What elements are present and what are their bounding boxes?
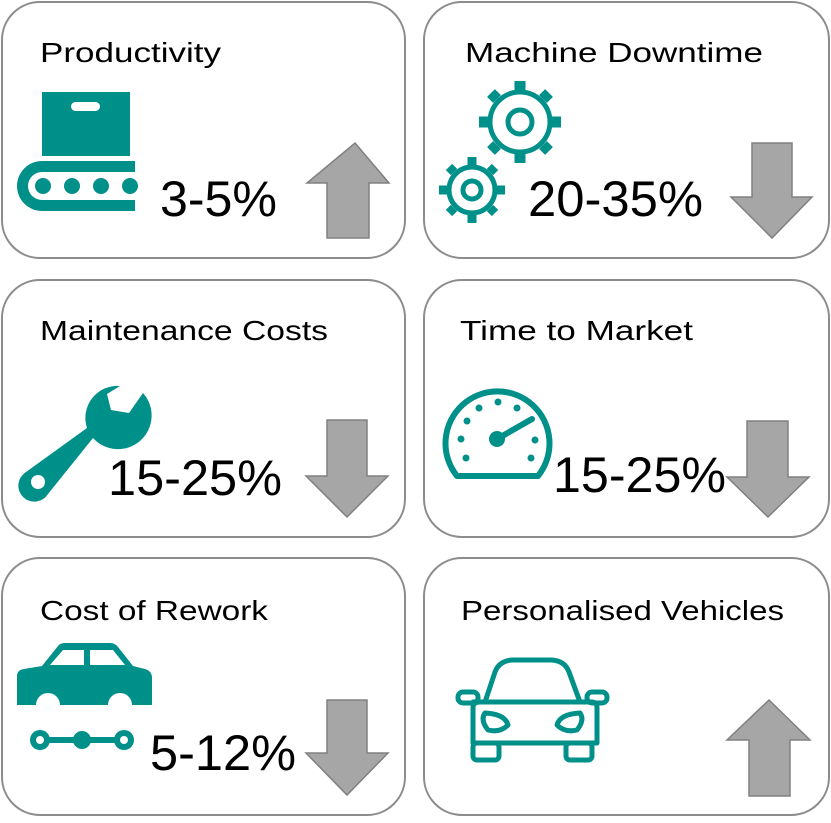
icon: conveyor bbox=[17, 92, 138, 211]
heading: maintenance costs: Maintenance Costs bbox=[40, 315, 328, 346]
arrow: down bbox=[306, 420, 388, 517]
heading: personalised vehicles: Personalised Vehicles bbox=[461, 595, 784, 626]
arrow: up bbox=[307, 143, 389, 238]
number: 15-25% (market): 15-25% bbox=[553, 447, 726, 503]
panel: time to market bbox=[424, 280, 829, 537]
arrow: down bbox=[727, 421, 809, 517]
number: 5-12%: 5-12% bbox=[150, 725, 296, 781]
heading: cost of rework: Cost of Rework bbox=[40, 595, 269, 626]
icon: speedometer bbox=[446, 391, 550, 476]
panel: maintenance costs bbox=[2, 280, 405, 537]
number: 3-5%: 3-5% bbox=[160, 171, 277, 227]
icon: car on line bbox=[17, 643, 152, 750]
number: 20-35%: 20-35% bbox=[528, 171, 703, 227]
panel: productivity bbox=[2, 2, 405, 258]
arrow: down bbox=[731, 143, 812, 238]
arrow: up bbox=[727, 700, 810, 796]
heading: machine downtime: Machine Downtime bbox=[465, 37, 763, 68]
heading: time to market: Time to Market bbox=[460, 315, 693, 346]
icon: wrench bbox=[18, 386, 152, 502]
panel: cost of rework bbox=[2, 558, 405, 815]
arrow: down bbox=[306, 700, 388, 795]
heading: productivity: Productivity bbox=[40, 37, 221, 68]
icon: gears bbox=[439, 81, 561, 223]
panel: machine downtime bbox=[424, 2, 829, 258]
number: 15-25% (maintenance): 15-25% bbox=[108, 450, 282, 506]
panel: personalised vehicles bbox=[424, 558, 829, 815]
icon: car outline bbox=[458, 660, 607, 760]
